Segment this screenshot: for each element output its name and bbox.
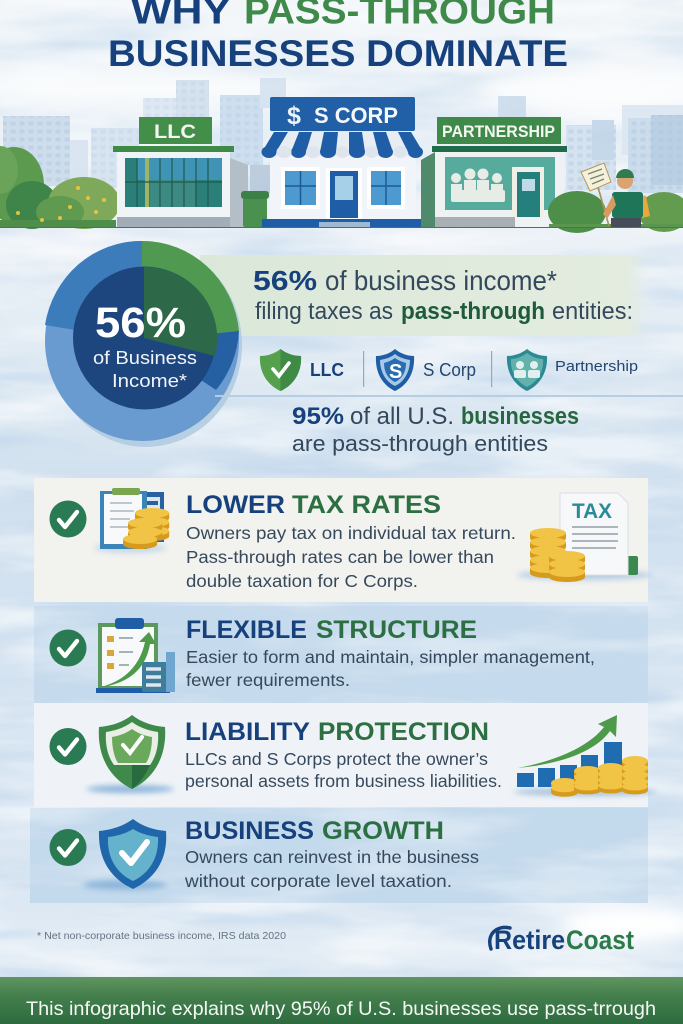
heading: LIABILITY [185, 718, 310, 746]
store: LLC [113, 117, 248, 227]
stat: 56% of business income: pass-through [401, 298, 545, 325]
entity: S Corp: S Corp [423, 359, 476, 380]
heading: STRUCTURE [316, 616, 477, 644]
stat: 95% of all U.S. businesses: businesses [461, 403, 579, 430]
store: S Corp: S CORP [314, 103, 398, 128]
body text: Owners pay tax on individual tax return. [186, 523, 516, 543]
footnote: * Net non-corporate business income, IRS data 2020 [37, 930, 286, 942]
skyline [3, 78, 683, 193]
LLC side wall [230, 158, 248, 227]
entity: Partnership: Partnership [555, 358, 638, 375]
heading [185, 817, 444, 845]
icon: tax document and coins [517, 493, 653, 582]
body text: fewer requirements. [186, 670, 350, 690]
heading: LOWER [186, 491, 285, 519]
title [108, 0, 568, 74]
logo: RetireCoast: Coast [566, 925, 634, 955]
body text [186, 647, 595, 690]
bushes left [0, 146, 120, 229]
entity: Partnership [507, 349, 638, 391]
heading: PROTECTION [318, 718, 489, 746]
check icon [50, 728, 86, 765]
store: S Corp [262, 97, 423, 227]
awning [262, 132, 423, 158]
stat: 95% of all U.S. businesses: 95% [292, 403, 344, 430]
heading [186, 491, 441, 519]
heading [186, 616, 477, 644]
stat: 56% of business income: filing taxes as [255, 298, 393, 325]
check icon [50, 500, 86, 538]
heading: FLEXIBLE [186, 616, 307, 644]
donut centre: 56% [95, 299, 186, 347]
panel: liability protection [34, 703, 657, 807]
store: Partnership [421, 117, 567, 227]
bushes right [548, 191, 683, 233]
icon: clipboard and coins [94, 488, 169, 553]
logo: RetireCoast [490, 925, 634, 955]
check icon [50, 829, 86, 866]
icon: tax document and coins: TAX [572, 500, 612, 523]
stat: 95% of all U.S. businesses: are pass-through entities [292, 431, 548, 456]
panel: lower tax rates [34, 478, 653, 602]
body text: Owners can reinvest in the business [185, 847, 479, 867]
body text [186, 523, 516, 591]
trash bin [241, 191, 269, 227]
stat: 95% of all U.S. businesses: of all U.S. [350, 403, 454, 430]
body text [185, 749, 502, 791]
icon: blue shield [83, 819, 167, 890]
panel: flexible structure [34, 606, 648, 703]
green band behind stat [200, 255, 648, 336]
body text: personal assets from business liabilities. [185, 771, 502, 791]
person with sign [581, 163, 650, 227]
icon: growth chart and coins [513, 715, 657, 797]
body text: LLCs and S Corps protect the owner’s [185, 749, 488, 769]
store: S Corp: $ [287, 102, 301, 130]
body text: double taxation for C Corps. [186, 571, 418, 591]
store: LLC: LLC [154, 122, 196, 143]
body text: without corporate level taxation. [184, 871, 452, 891]
body text: Easier to form and maintain, simpler management, [186, 647, 595, 667]
footer banner: This infographic explains why 95% of U.S. businesses use pass-trrough [26, 998, 656, 1020]
store: Partnership: PARTNERSHIP [442, 123, 555, 141]
donut centre: Income* [112, 371, 187, 391]
entity: S Corp [376, 349, 476, 391]
footer banner [0, 977, 683, 1024]
icon: green shield [86, 715, 174, 793]
stat: 56% of business income: of business income* [325, 265, 557, 296]
stat: 56% of business income [253, 265, 633, 325]
entity: LLC [260, 349, 344, 391]
stat: 95% of all U.S. businesses [292, 403, 579, 456]
check icon [50, 630, 86, 666]
heading: GROWTH [322, 817, 444, 845]
donut centre [73, 266, 217, 410]
donut centre: of Business [93, 348, 197, 368]
icon: checklist with arrow [96, 618, 175, 693]
header divider [0, 227, 683, 228]
heading [185, 718, 489, 746]
heading: BUSINESS [185, 817, 314, 845]
entity: S Corp: S [389, 361, 402, 383]
title: BUSINESSES DOMINATE [108, 33, 568, 74]
people icon [451, 168, 505, 202]
entity: LLC: LLC [310, 359, 344, 380]
logo: RetireCoast: Retire [494, 925, 565, 955]
body text [184, 847, 479, 891]
stat: 56% of business income: entities: [552, 298, 633, 325]
panel: business growth [30, 808, 648, 903]
stat: 56% of business income: 56% [253, 265, 317, 296]
donut chart: 56% of business income [45, 241, 242, 447]
heading: TAX RATES [292, 491, 441, 519]
body text: Pass-through rates can be lower than [186, 547, 494, 567]
